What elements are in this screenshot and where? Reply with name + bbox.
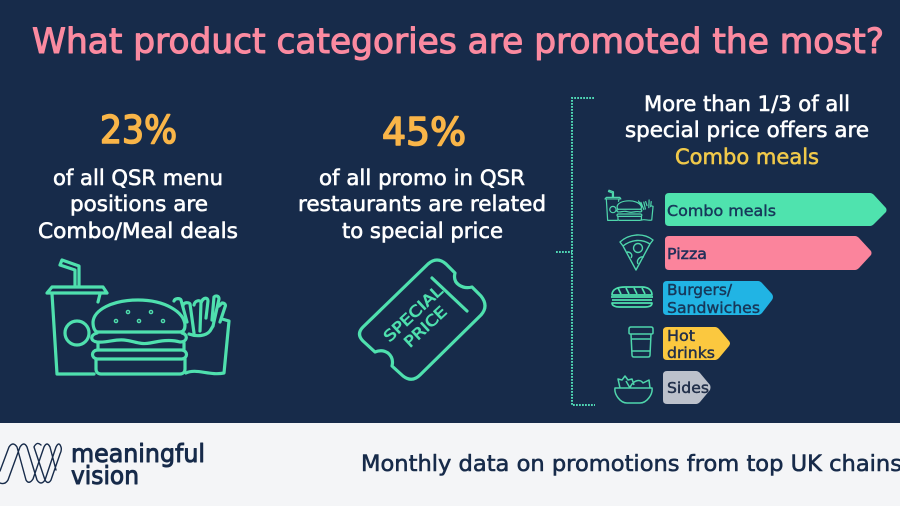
stat: 23%: 23%	[100, 108, 177, 152]
icon: salad bowl	[615, 376, 652, 403]
text: menu positions description: positions are	[70, 192, 208, 216]
bar: burgers and sandwiches: Burgers/	[667, 281, 733, 299]
logo wordmark: meaningful	[71, 439, 205, 468]
logo: meaningful vision	[0, 439, 205, 490]
bar: hot drinks: drinks	[667, 344, 715, 362]
logo wordmark	[71, 439, 205, 490]
icon: special price ticket: PRICE	[400, 303, 451, 351]
text: promo description: restaurants are related	[298, 192, 546, 216]
text: menu positions description: of all QSR menu	[53, 166, 223, 190]
panel: combo meal deals stat	[38, 108, 238, 374]
icon: special price ticket	[360, 260, 485, 379]
panel: special price stat	[298, 110, 546, 379]
heading: more than one third: Combo meals	[675, 145, 819, 169]
bar: sides	[663, 371, 710, 404]
title: What product categories are promoted the most?	[32, 22, 884, 62]
bar: pizza: Pizza	[667, 245, 707, 263]
bar: combo meals: Combo meals	[667, 202, 776, 220]
text: promo description: of all promo in QSR	[319, 166, 525, 190]
bar: sides: Sides	[667, 379, 709, 397]
logo wordmark: vision	[71, 461, 139, 490]
bar: combo meals	[665, 193, 886, 226]
heading: more than one third	[625, 92, 869, 169]
icon: special price ticket: SPECIAL	[380, 281, 447, 346]
bar: burgers and sandwiches	[663, 281, 773, 317]
icon: pizza slice	[620, 235, 653, 270]
text: menu positions description: Combo/Meal deals	[38, 219, 238, 243]
text: promo description	[298, 166, 546, 243]
icon: drink, burger and fries	[47, 260, 229, 374]
icon: coffee cup	[629, 327, 653, 357]
bar: hot drinks	[663, 327, 730, 362]
stat: 45%: 45%	[382, 110, 466, 154]
footer band	[0, 423, 900, 506]
heading: more than one third: special price offers are	[625, 118, 869, 142]
panel: special price offers chart	[556, 92, 886, 405]
icon: sandwich	[611, 287, 653, 307]
bar: burgers and sandwiches: Sandwiches	[667, 299, 760, 317]
logo mark	[0, 443, 61, 484]
text: menu positions description	[38, 166, 238, 243]
icon: combo meal small	[605, 190, 653, 220]
heading: more than one third: More than 1/3 of all	[644, 92, 850, 116]
bracket	[556, 98, 595, 405]
bar: pizza	[665, 236, 872, 270]
bar: hot drinks: Hot	[667, 327, 695, 345]
text: promo description: to special price	[342, 219, 503, 243]
tagline: Monthly data on promotions from top UK chains	[361, 452, 900, 477]
